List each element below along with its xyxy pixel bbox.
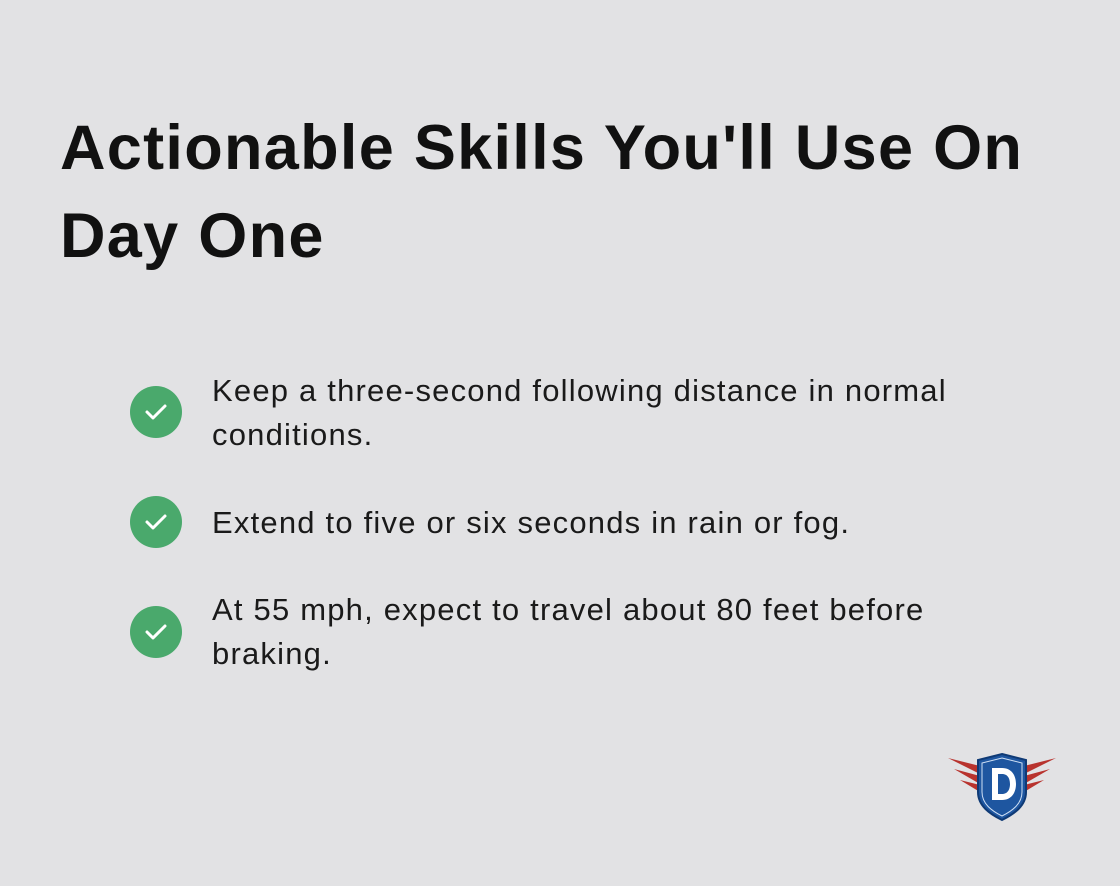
logo [948,753,1056,822]
icon: check [130,386,182,438]
text 1: Keep a three-second following distance in normal conditions. [212,373,947,452]
title: Actionable Skills You'll Use On [60,113,1023,183]
item 1 [130,373,947,452]
item 3 [130,592,924,671]
icon: check [130,496,182,548]
text 3: At 55 mph, expect to travel about 80 feet before braking. [212,592,924,671]
title: Day One [60,201,325,271]
item 2 [130,496,850,548]
title [60,113,1023,271]
text 2: Extend to five or six seconds in rain or fog. [212,505,850,540]
icon: check [130,606,182,658]
